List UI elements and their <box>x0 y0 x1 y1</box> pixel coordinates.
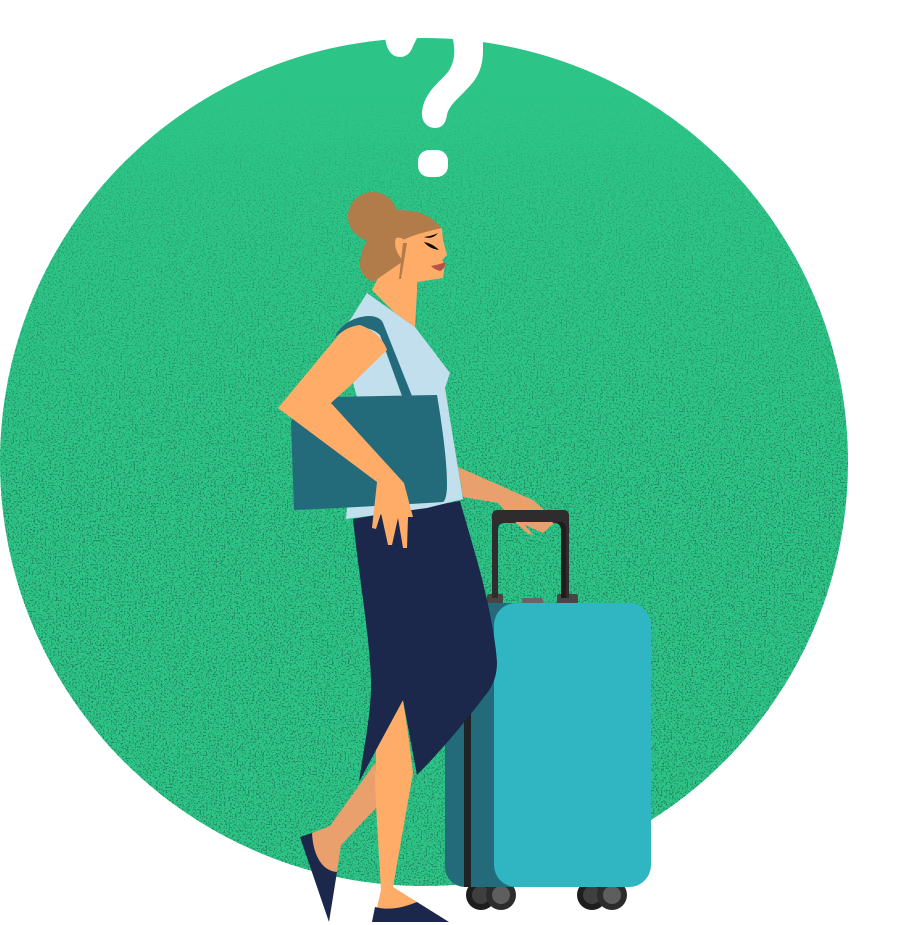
rear leg <box>312 763 377 872</box>
skirt <box>353 501 497 782</box>
front arm and hand <box>278 325 413 548</box>
rear shoe <box>300 833 337 922</box>
closed eye and lashes <box>424 233 439 250</box>
hair <box>348 192 442 282</box>
handbag strap <box>335 316 412 396</box>
handle bar over hand <box>494 510 569 522</box>
handbag <box>291 395 447 510</box>
hair strand <box>399 243 407 279</box>
rear arm and hand <box>458 467 553 535</box>
suitcase wheels <box>466 880 627 910</box>
front shoe <box>372 902 449 922</box>
front leg <box>375 700 417 912</box>
suitcase handle <box>487 510 578 604</box>
suitcase rear shell <box>445 603 565 887</box>
icon: question mark <box>385 36 483 177</box>
lips <box>431 262 445 271</box>
suitcase front shell <box>494 603 651 887</box>
sleeveless top <box>337 293 463 519</box>
ear <box>395 238 405 260</box>
suitcase <box>445 510 651 910</box>
neck and face <box>372 228 447 327</box>
woman <box>278 192 569 922</box>
suitcase dark strap <box>464 700 471 887</box>
